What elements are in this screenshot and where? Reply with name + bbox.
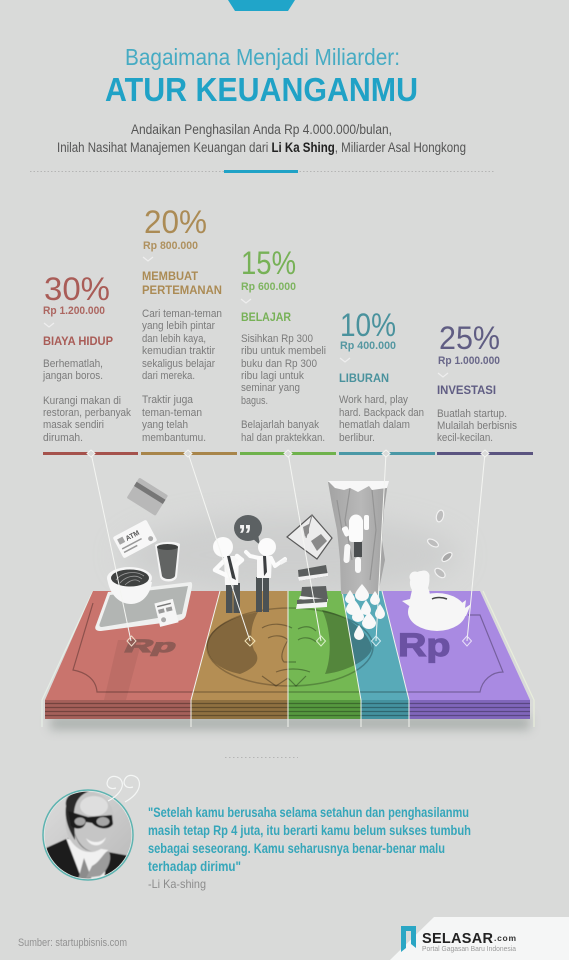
quote marks: [107, 775, 139, 802]
title line: Bagaimana Menjadi Miliarder:: [125, 44, 400, 70]
column: 10% liburan: Rp 400.000: [340, 340, 396, 352]
logo block: SELASAR: [422, 931, 494, 947]
outer pale edges: [42, 591, 93, 727]
logo block: [390, 917, 569, 960]
column: 30% biaya hidup: 30%: [44, 271, 110, 307]
column: 20% membuat pertemanan: membantumu.: [142, 432, 206, 444]
column: 20% membuat pertemanan: kemudian traktir: [142, 345, 215, 357]
column: 30% biaya hidup: BIAYA HIDUP: [43, 334, 113, 348]
stack shadow: [50, 716, 530, 730]
quote text: terhadap dirimu": [148, 859, 241, 874]
note segment: green: [288, 591, 361, 700]
column: 15% belajar: buku dan Rp 300: [241, 358, 317, 370]
column: 15% belajar: Belajarlah banyak: [241, 419, 319, 431]
column: 30% biaya hidup: jangan boros.: [42, 370, 103, 382]
column: 20% membuat pertemanan: dan lebih kaya,: [142, 333, 206, 345]
column: 20% membuat pertemanan: dari mereka.: [142, 370, 195, 382]
header: [57, 44, 466, 155]
column: 15% belajar: 15%: [241, 245, 296, 281]
column: 10% liburan: berlibur.: [339, 432, 375, 444]
banknote portrait: [73, 603, 503, 700]
column: 10% liburan: Work hard, play: [339, 394, 408, 406]
quote text: [148, 805, 471, 891]
figure: climber: [341, 514, 369, 573]
column: 20% membuat pertemanan: Rp 800.000: [143, 240, 198, 252]
column: 20% membuat pertemanan: [142, 204, 222, 444]
column: 30% biaya hidup: [42, 271, 131, 444]
coins: [426, 509, 454, 580]
pointer: liburan: [372, 450, 390, 646]
quote text: "Setelah kamu berusaha selama setahun dan penghasilanmu: [148, 805, 469, 820]
column: 20% membuat pertemanan: yang telah: [142, 419, 188, 431]
column: 25% investasi: Rp 1.000.000: [438, 355, 500, 367]
subtitle: Inilah Nasihat Manajemen Keuangan dari Li Ka Shing, Miliarder Asal Hongkong: [57, 140, 466, 155]
column: 25% investasi: INVESTASI: [437, 383, 496, 397]
column: 15% belajar: Rp 600.000: [241, 281, 296, 293]
note segment: red: [45, 591, 220, 700]
stack front edge: [45, 700, 530, 719]
column: 25% investasi: Mulailah berbisnis: [437, 420, 517, 432]
banknote stack: [42, 591, 534, 730]
column: 20% membuat pertemanan: MEMBUAT: [142, 269, 199, 283]
icon: stacked books: [279, 558, 328, 609]
icon: receipt: [154, 599, 179, 627]
column: 20% membuat pertemanan: teman-teman: [142, 407, 202, 419]
logo block: Portal Gagasan Baru Indonesia: [422, 946, 516, 953]
column: 30% biaya hidup: Kurangi makan di: [43, 395, 121, 407]
column: 20% membuat pertemanan: sekaligus belajar: [142, 358, 215, 370]
portrait of Li Ka-shing: [43, 775, 139, 880]
quote text: sebagai seseorang. Kamu seharusnya benar-benar malu: [148, 841, 445, 856]
icon: cup: [155, 542, 180, 582]
figure: right person: [246, 538, 285, 612]
note segment: brown: [191, 591, 288, 700]
logo block: .com: [494, 933, 516, 943]
Rp mark left: Rp: [121, 637, 181, 656]
subtitle: Andaikan Penghasilan Anda Rp 4.000.000/bulan,: [131, 122, 392, 137]
background glow behind illustration: [120, 515, 460, 595]
column: 30% biaya hidup: dirumah.: [43, 432, 83, 444]
pointer: investasi: [462, 450, 489, 646]
column: 15% belajar: Sisihkan Rp 300: [241, 333, 313, 345]
Rp mark right: Rp: [398, 627, 450, 663]
column: 20% membuat pertemanan: PERTEMANAN: [142, 283, 222, 297]
quote text: masih tetap Rp 4 juta, itu berarti kamu belum sukses tumbuh: [148, 823, 471, 838]
column: 10% liburan: hematlah dalam: [339, 419, 410, 431]
column: 10% liburan: [339, 307, 424, 444]
column: 15% belajar: seminar yang: [241, 382, 300, 394]
pointer: membuat pertemanan: [184, 450, 255, 646]
segment dividers: [191, 591, 409, 727]
column: 20% membuat pertemanan: Traktir juga: [142, 394, 194, 406]
subtitle: [57, 122, 466, 155]
top tab: [228, 0, 295, 11]
column: 15% belajar: ribu untuk membeli: [241, 345, 326, 357]
pointer: belajar: [284, 450, 326, 646]
column: 20% membuat pertemanan: 20%: [144, 204, 207, 240]
column: 25% investasi: 25%: [439, 320, 500, 356]
icon: credit card: [127, 477, 168, 516]
icon: speech bubble: ”: [238, 519, 252, 550]
column: 15% belajar: ribu lagi untuk: [241, 370, 304, 382]
column: 15% belajar: [241, 245, 326, 444]
column: 25% investasi: kecil-kecilan.: [437, 432, 493, 444]
icon: open book: [287, 515, 332, 559]
colored rule bars: [43, 452, 533, 455]
snowy trees: [345, 584, 385, 640]
quote attribution: -Li Ka-shing: [148, 877, 206, 891]
source: Sumber: startupbisnis.com: [18, 937, 127, 949]
column: 25% investasi: Buatlah startup.: [437, 408, 507, 420]
column: 30% biaya hidup: Berhematlah,: [43, 358, 103, 370]
bill border line: [73, 603, 503, 692]
figure: left person: [213, 537, 242, 613]
pointer lines: [87, 450, 489, 646]
column: 20% membuat pertemanan: yang lebih pintar: [142, 320, 215, 332]
icon: speech bubble: [234, 515, 262, 550]
main title: ATUR KEUANGANMU: [105, 71, 418, 108]
icon: chicken piggy bank: [402, 570, 471, 631]
icon: ATM card: [113, 519, 157, 559]
column: 10% liburan: hard. Backpack dan: [339, 407, 424, 419]
icon: tray: [95, 582, 192, 631]
column: 30% biaya hidup: restoran, perbanyak: [43, 407, 131, 419]
icon: noodle bowl: [107, 567, 152, 604]
cliff: [328, 481, 389, 594]
column: 15% belajar: hal dan praktekkan.: [241, 432, 325, 444]
column: 20% membuat pertemanan: Cari teman-teman: [142, 308, 222, 320]
column: 15% belajar: BELAJAR: [241, 310, 291, 324]
note segment: teal: [342, 591, 409, 700]
pointer: biaya hidup: [87, 450, 136, 646]
column: 10% liburan: 10%: [340, 307, 396, 343]
column: 30% biaya hidup: Rp 1.200.000: [43, 305, 105, 317]
column: 15% belajar: bagus.: [241, 395, 268, 407]
column: 25% investasi: [437, 320, 517, 444]
column: 30% biaya hidup: masak sendiri: [43, 419, 104, 431]
column: 10% liburan: LIBURAN: [339, 371, 389, 385]
note segment: purple: [382, 591, 530, 700]
icon: ATM card: ATM: [125, 530, 141, 543]
